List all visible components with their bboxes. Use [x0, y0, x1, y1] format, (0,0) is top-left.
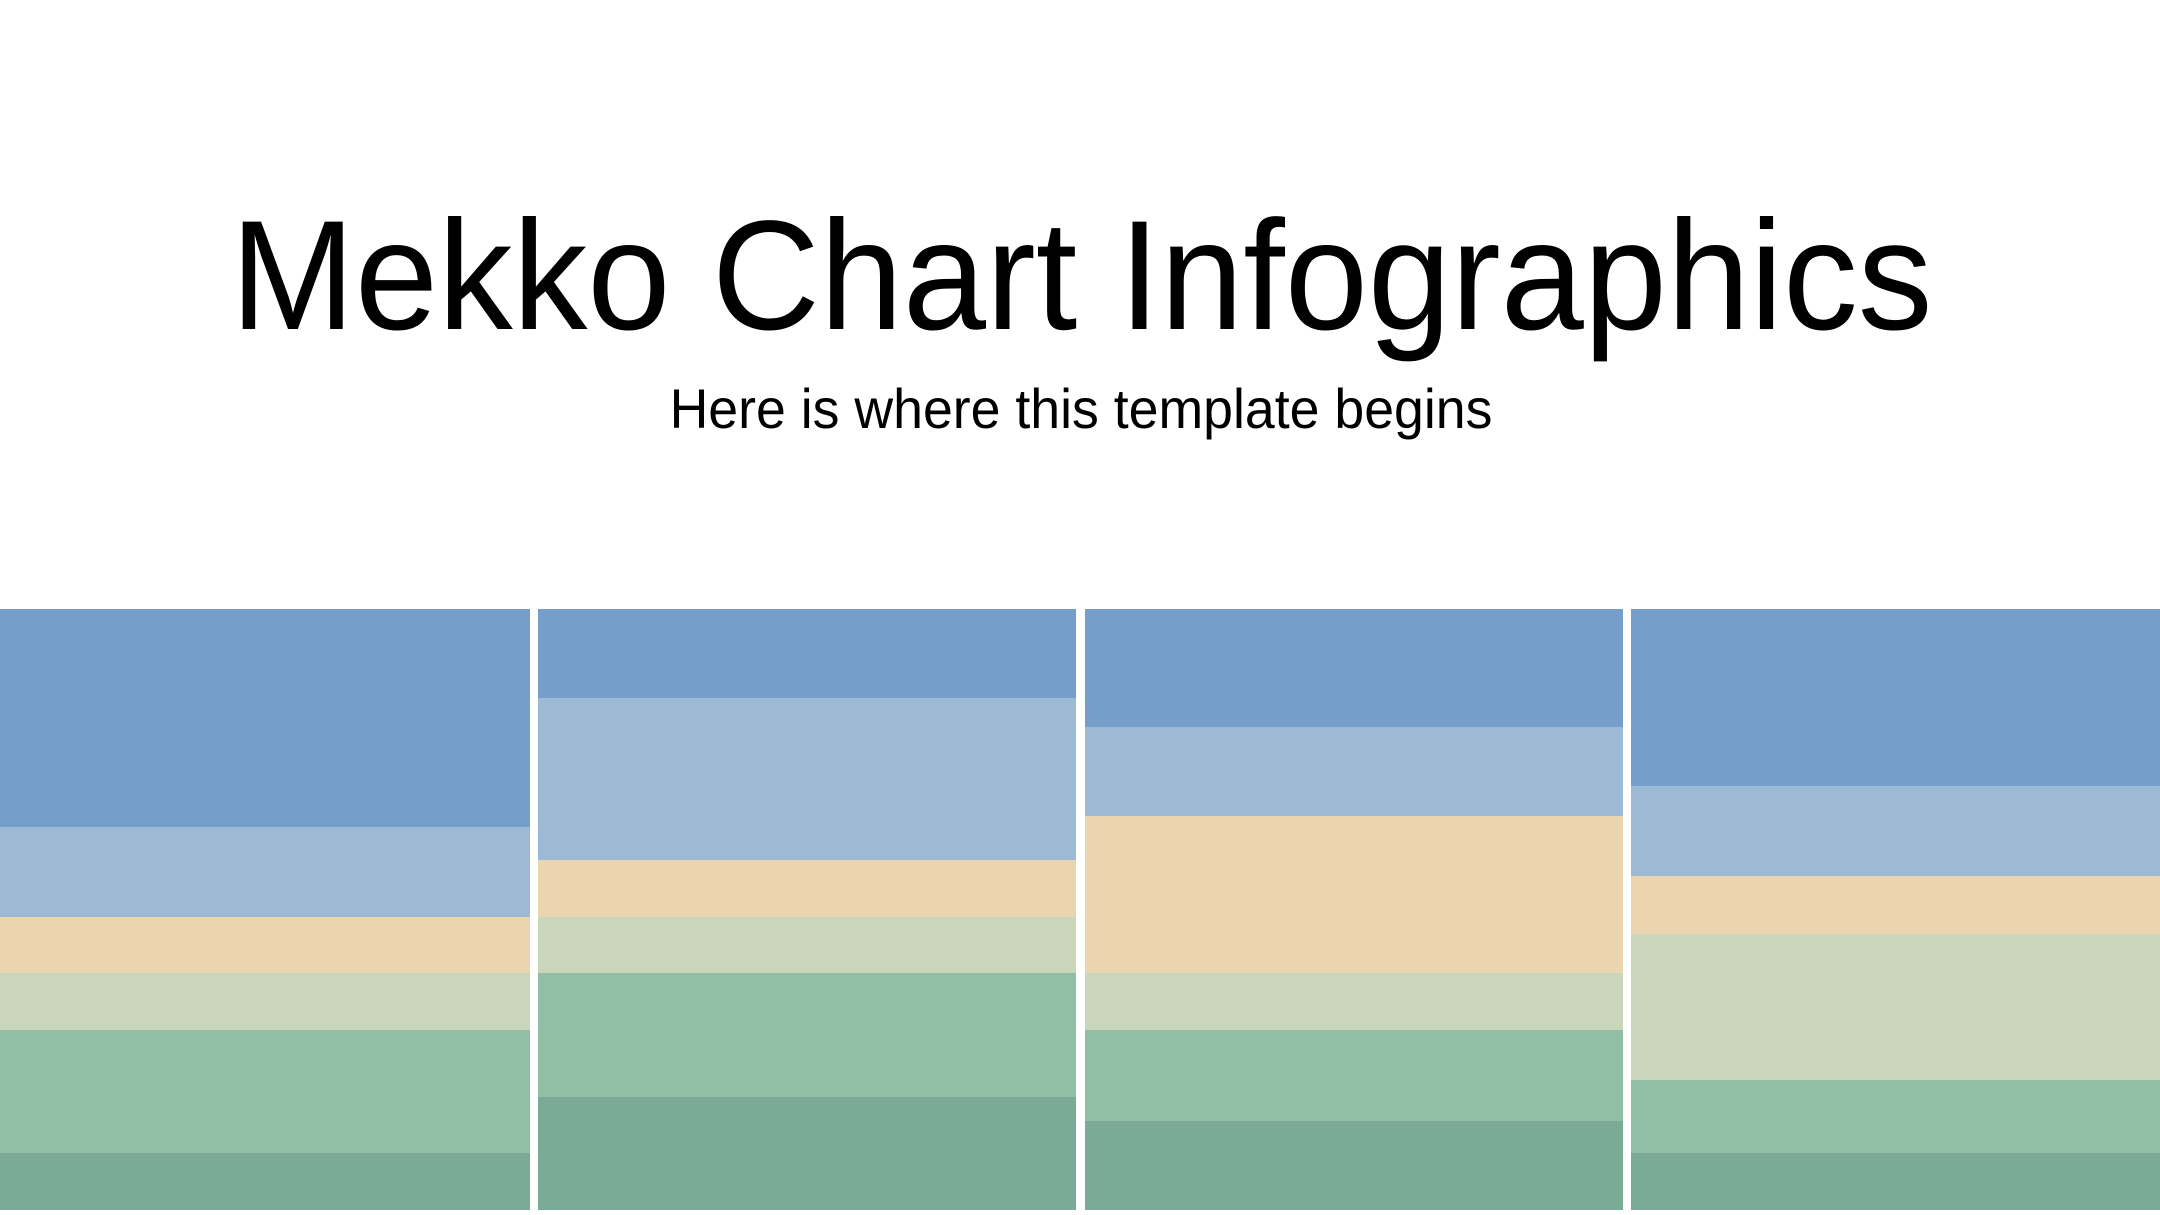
title: Mekko Chart Infographics	[230, 189, 1933, 363]
mekko chart	[0, 609, 2160, 1210]
column 1	[0, 609, 530, 1210]
column 4	[1631, 609, 2160, 1210]
subtitle: Here is where this template begins	[670, 377, 1492, 440]
column 3	[1085, 609, 1623, 1210]
column 2	[538, 609, 1076, 1210]
